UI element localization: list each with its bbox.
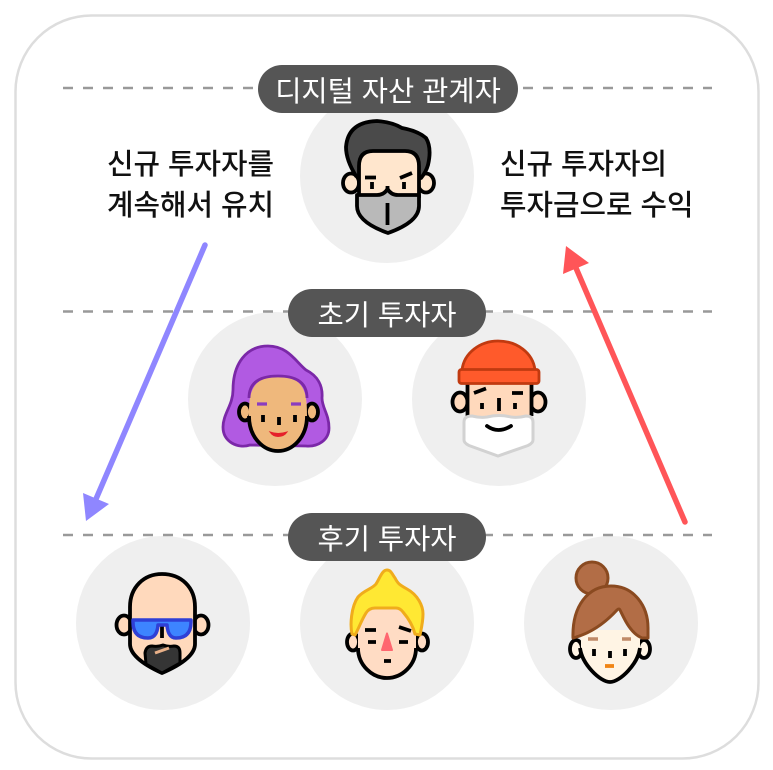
arrow: blue, downward to late investors xyxy=(83,245,205,521)
text block: profit from new investors' money: 투자금으로 수익 xyxy=(500,190,693,222)
icon: bald man with blue sunglasses xyxy=(116,574,208,673)
text block: profit from new investors' money xyxy=(500,149,693,222)
avatar background circle: late middle xyxy=(300,536,474,710)
avatar background circle: top xyxy=(300,89,474,263)
heading pill: digital asset insiders xyxy=(258,65,518,113)
text block: keep attracting new investors: 계속해서 유치 xyxy=(107,190,274,222)
text block: profit from new investors' money: 신규 투자자의 xyxy=(500,149,667,181)
icon: man with yellow spiky hair xyxy=(347,570,428,678)
icon: woman with brown hair bun xyxy=(570,562,650,682)
text block: keep attracting new investors: 신규 투자자를 xyxy=(107,149,274,181)
heading pill: late investors xyxy=(288,513,486,561)
heading pill: late investors: 후기 투자자 xyxy=(317,524,457,556)
heading pill: early investors: 초기 투자자 xyxy=(317,300,457,332)
arrow: red, upward to insiders xyxy=(563,246,685,522)
heading pill: early investors xyxy=(288,289,486,337)
heading pill: digital asset insiders: 디지털 자산 관계자 xyxy=(275,76,501,108)
icon: masked man with dark hair xyxy=(343,121,434,233)
avatar background circle: late left xyxy=(76,536,250,710)
icon: bearded man with orange beanie xyxy=(452,341,546,456)
avatar background circle: late right xyxy=(524,536,698,710)
text block: keep attracting new investors xyxy=(107,149,274,222)
avatar background circle: early left xyxy=(188,312,362,486)
icon: woman with purple hair xyxy=(223,346,329,451)
avatar background circle: early right xyxy=(412,312,586,486)
